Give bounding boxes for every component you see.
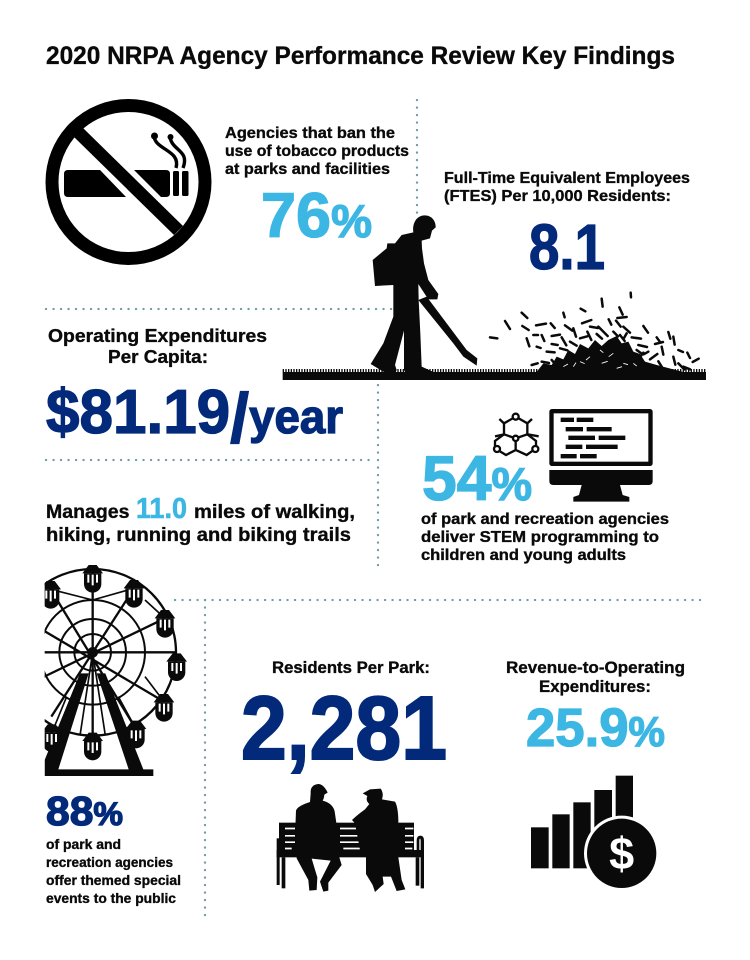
- panel: residents per park: [241, 659, 447, 892]
- stat: 88%: 88%: [46, 788, 123, 834]
- leaf pile: [490, 293, 699, 372]
- text: STEM description: [421, 511, 669, 564]
- text: trails managed: [46, 493, 355, 546]
- dotted section dividers: [46, 100, 706, 916]
- heading: operating expenditures: Operating Expenditures: [48, 325, 267, 346]
- heading: operating expenditures: Per Capita:: [108, 346, 208, 367]
- text: STEM description: of park and recreation agencies: [421, 511, 669, 528]
- heading: residents per park: Residents Per Park:: [272, 659, 430, 677]
- icon: ferris wheel: [44, 565, 187, 776]
- icon: two men on a bench: [277, 784, 424, 892]
- stat: $81.19/year: /: [230, 379, 249, 457]
- ground grass: [283, 371, 706, 380]
- stat: 76%: 76%: [261, 181, 372, 251]
- heading: FTEs: [444, 170, 690, 205]
- text: STEM description: deliver STEM programming to: [421, 529, 659, 546]
- heading: revenue to operating: Revenue-to-Operating: [506, 659, 685, 677]
- text: tobacco ban description: use of tobacco products: [225, 143, 409, 160]
- heading: revenue to operating: Expenditures:: [539, 678, 651, 696]
- text: trails managed: hiking, running and biking trails: [46, 524, 351, 546]
- text: tobacco ban description: Agencies that ban the: [225, 125, 395, 142]
- icon: rising bars with dollar coin: $: [609, 828, 634, 879]
- worker silhouette: [371, 215, 438, 375]
- stat: 8.1: 8.1: [529, 211, 605, 283]
- icon: rising bars with dollar coin: [531, 776, 659, 891]
- heading: FTEs: Full-Time Equivalent Employees: [444, 170, 690, 187]
- text: trails managed: miles of walking,: [194, 501, 355, 523]
- man left: [295, 784, 342, 892]
- stat: 25.9%: 25.9%: [526, 698, 665, 758]
- panel: operating expenditures: [46, 325, 343, 457]
- stat: $81.19/year: $81.19: [46, 378, 236, 447]
- text: tobacco ban description: [225, 125, 409, 178]
- text: special events description: of park and: [46, 837, 121, 852]
- blower tube: [418, 297, 477, 366]
- panel: FTEs per residents: [444, 170, 690, 283]
- bench: [277, 823, 424, 888]
- title: 2020 NRPA Agency Performance Review Key Findings: [46, 42, 675, 70]
- text: trails managed: Manages: [46, 501, 130, 523]
- text: special events description: [46, 837, 181, 906]
- text: STEM description: children and young adults: [421, 547, 626, 564]
- panel: tobacco ban: [52, 106, 409, 258]
- stat: 54%: 54%: [422, 444, 532, 514]
- panel: revenue to operating expenditures: [506, 659, 685, 891]
- panel: themed special events: [44, 565, 187, 906]
- text: special events description: offer themed special: [46, 873, 181, 888]
- icon: computer monitor: [549, 409, 653, 502]
- text: special events description: recreation agencies: [46, 855, 173, 870]
- stat: 2,281: 2,281: [241, 679, 447, 779]
- icon: no smoking: [52, 106, 205, 258]
- text: special events description: events to the public: [46, 891, 176, 906]
- panel: STEM programming: [421, 409, 669, 564]
- icon: molecule: [494, 414, 539, 455]
- stat: $81.19/year: year: [249, 390, 343, 443]
- text: trails managed: 11.0: [136, 493, 187, 525]
- heading: FTEs: (FTES) Per 10,000 Residents:: [444, 188, 671, 205]
- text: tobacco ban description: at parks and facilities: [225, 161, 390, 178]
- heading: operating expenditures: [48, 325, 267, 367]
- icon: molecule and computer: [494, 409, 653, 502]
- illustration: worker with leaf blower: [283, 215, 706, 380]
- heading: revenue to operating: [506, 659, 685, 696]
- man right: [352, 789, 405, 892]
